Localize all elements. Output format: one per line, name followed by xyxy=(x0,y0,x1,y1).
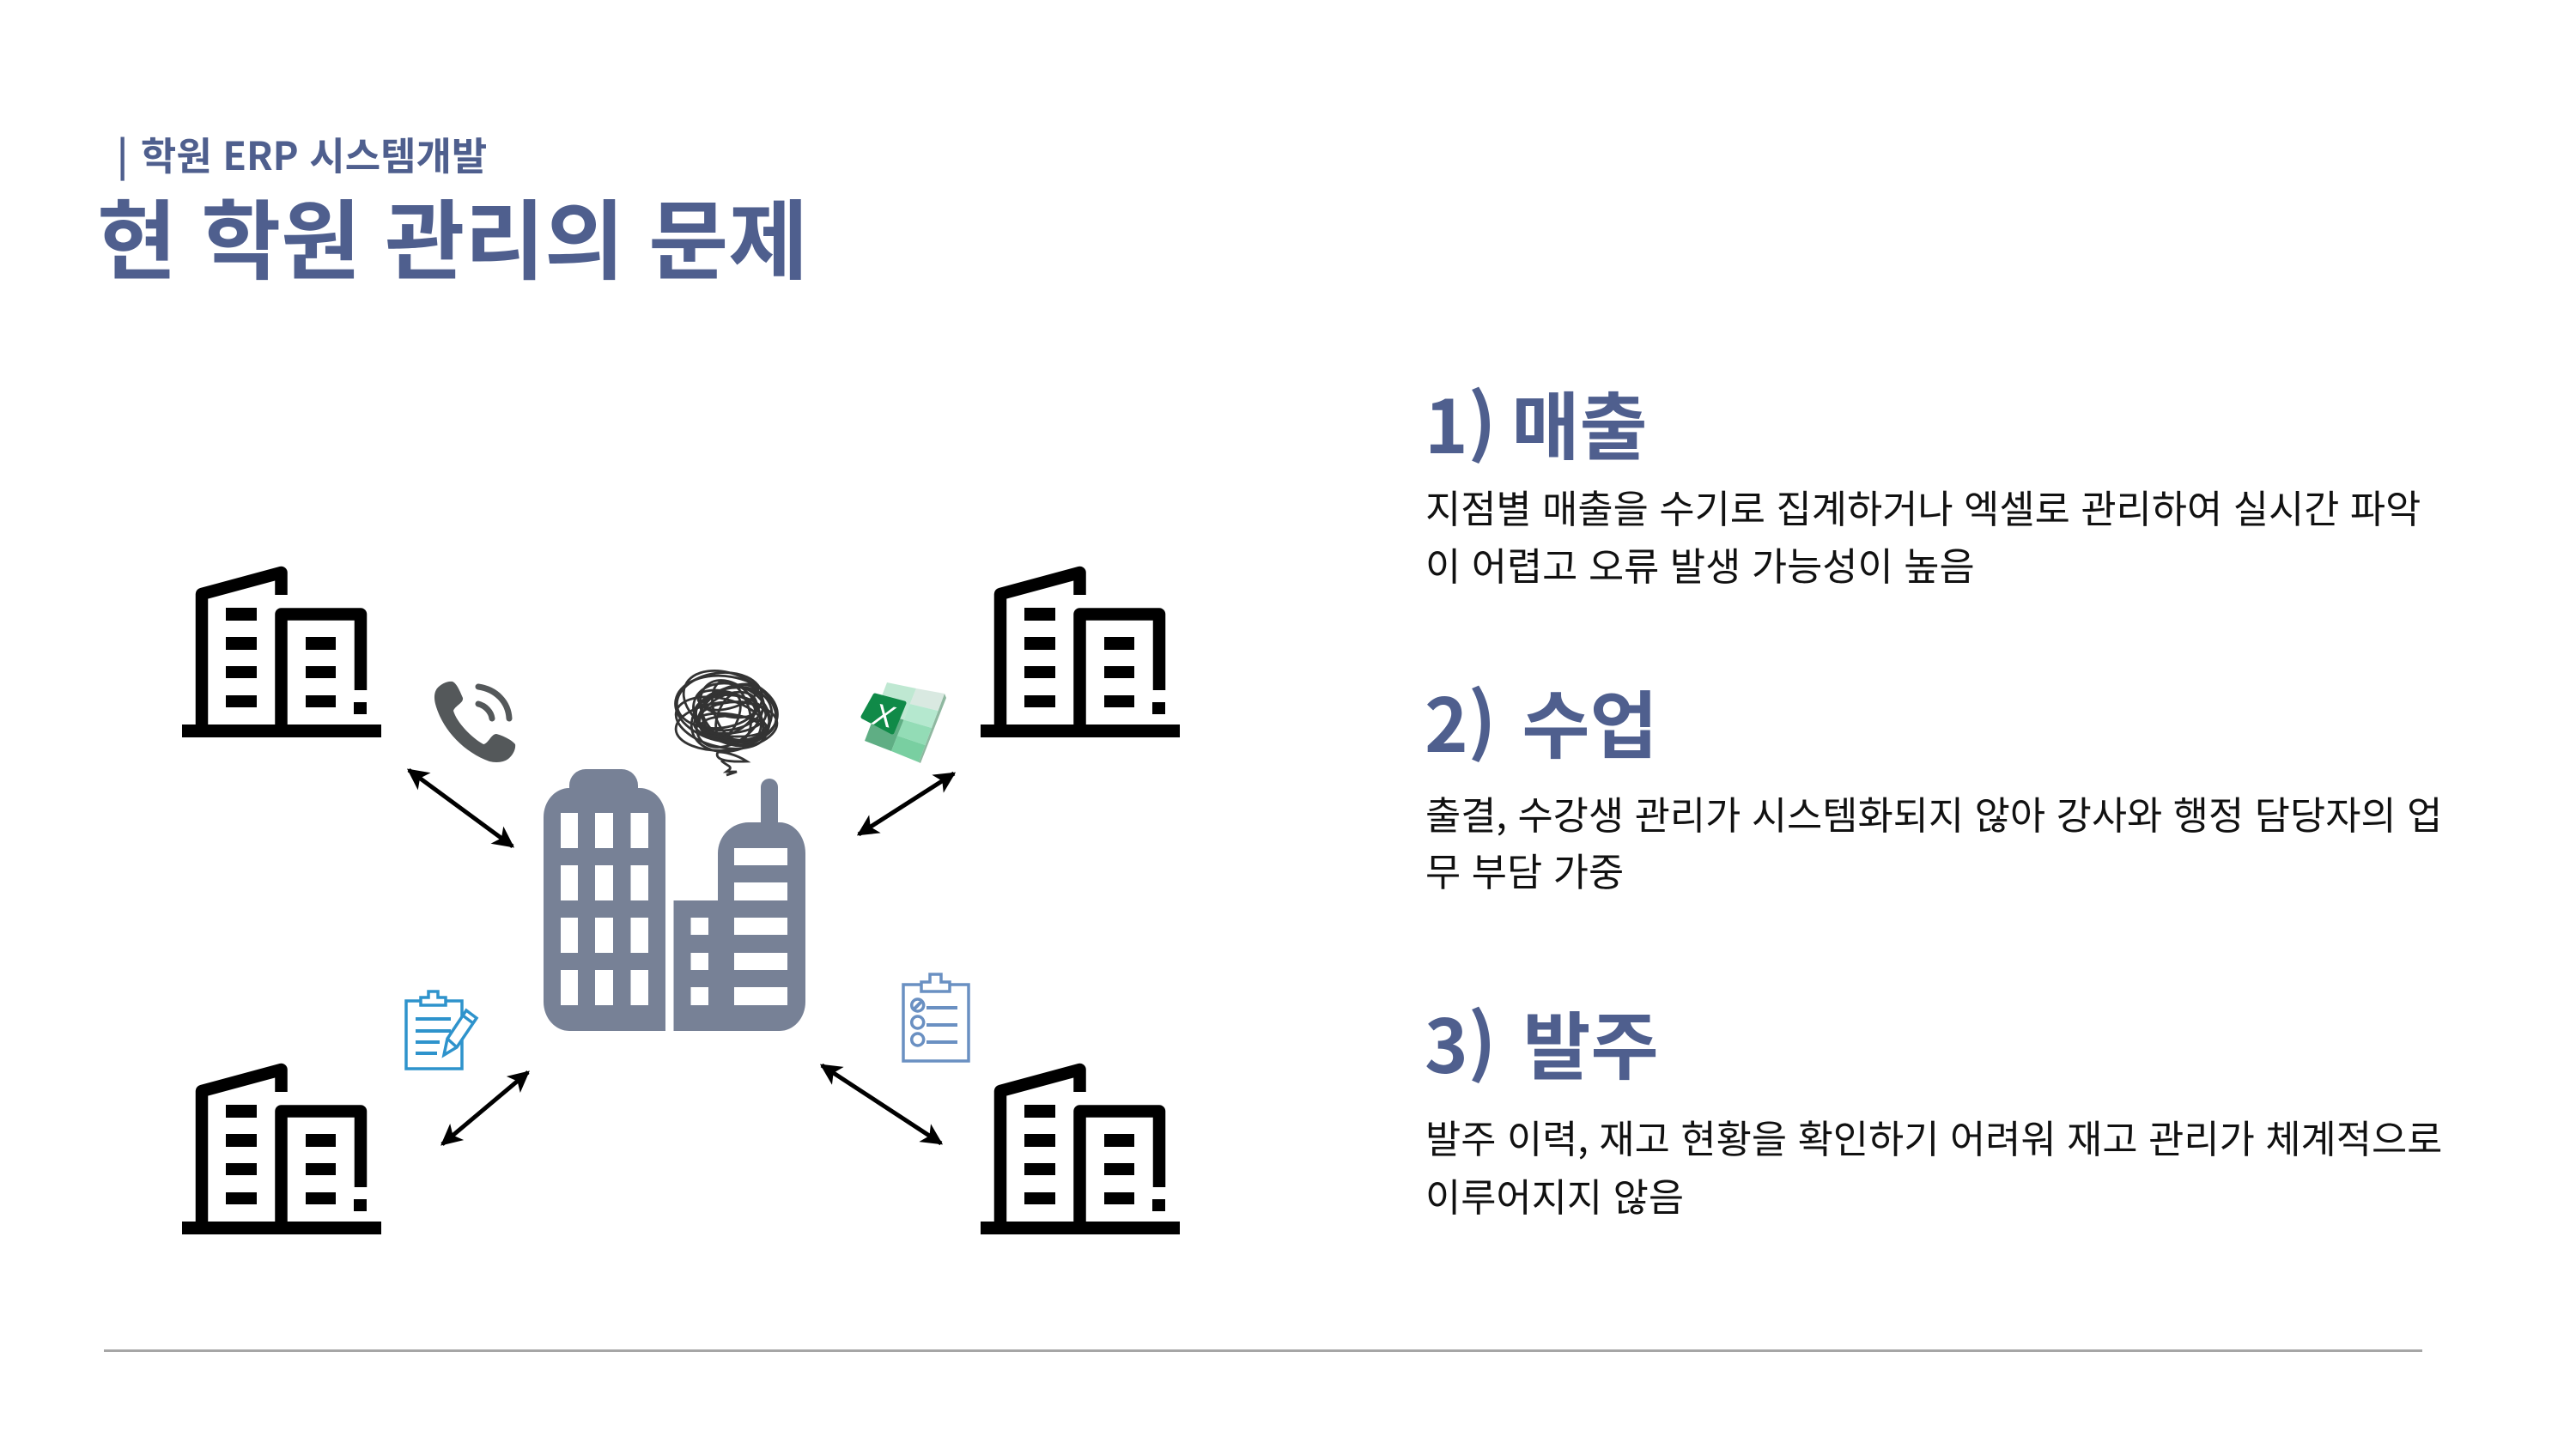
text: classes problem: 무 부담 가중 xyxy=(1425,841,1624,897)
text: sales problem: 이 어렵고 오류 발생 가능성이 높음 xyxy=(1425,536,1975,591)
text: sales problem xyxy=(1425,478,2421,591)
arrow: top left branch to headquarters xyxy=(409,770,513,846)
arrow: top right branch to headquarters xyxy=(859,773,954,834)
section 1 xyxy=(1425,367,2421,591)
icon: spreadsheet app: X xyxy=(869,696,899,735)
section 2 xyxy=(1425,666,2442,897)
icon: branch building bottom right xyxy=(981,1070,1180,1234)
text: ordering problem xyxy=(1425,1108,2442,1222)
subtitle: | 학원 ERP 시스템개발 xyxy=(117,125,487,181)
heading: sales: 1) 매출 xyxy=(1425,367,1648,475)
text: sales problem: 지점별 매출을 수기로 집계하거나 엑셀로 관리하여 실시간 파악 xyxy=(1425,478,2421,534)
text: ordering problem: 발주 이력, 재고 현황을 확인하기 어려워 재고 관리가 체계적으로 xyxy=(1425,1108,2442,1164)
arrow: bottom left branch to headquarters xyxy=(442,1072,528,1144)
icon: branch building top right xyxy=(981,573,1180,737)
icon: tangled scribble xyxy=(670,657,787,775)
icon: phone xyxy=(434,682,515,762)
text: ordering problem: 이루어지지 않음 xyxy=(1425,1167,1684,1222)
heading: ordering: 3) 발주 xyxy=(1425,987,1659,1094)
text: classes problem xyxy=(1425,785,2442,897)
icon: central headquarters building xyxy=(544,769,805,1031)
arrow: bottom right branch to headquarters xyxy=(822,1065,941,1143)
icon: branch building top left xyxy=(182,573,381,737)
icon: clipboard with pencil xyxy=(406,991,477,1069)
section 3 xyxy=(1425,987,2442,1222)
title: 현 학원 관리의 문제 xyxy=(97,173,808,298)
text: classes problem: 출결, 수강생 관리가 시스템화되지 않아 강사와 행정 담당자의 업 xyxy=(1425,785,2442,840)
icon: clipboard checklist xyxy=(903,974,969,1061)
heading: classes: 2) 수업 xyxy=(1425,666,1658,773)
icon: spreadsheet app xyxy=(863,682,946,763)
icon: branch building bottom left xyxy=(182,1070,381,1234)
